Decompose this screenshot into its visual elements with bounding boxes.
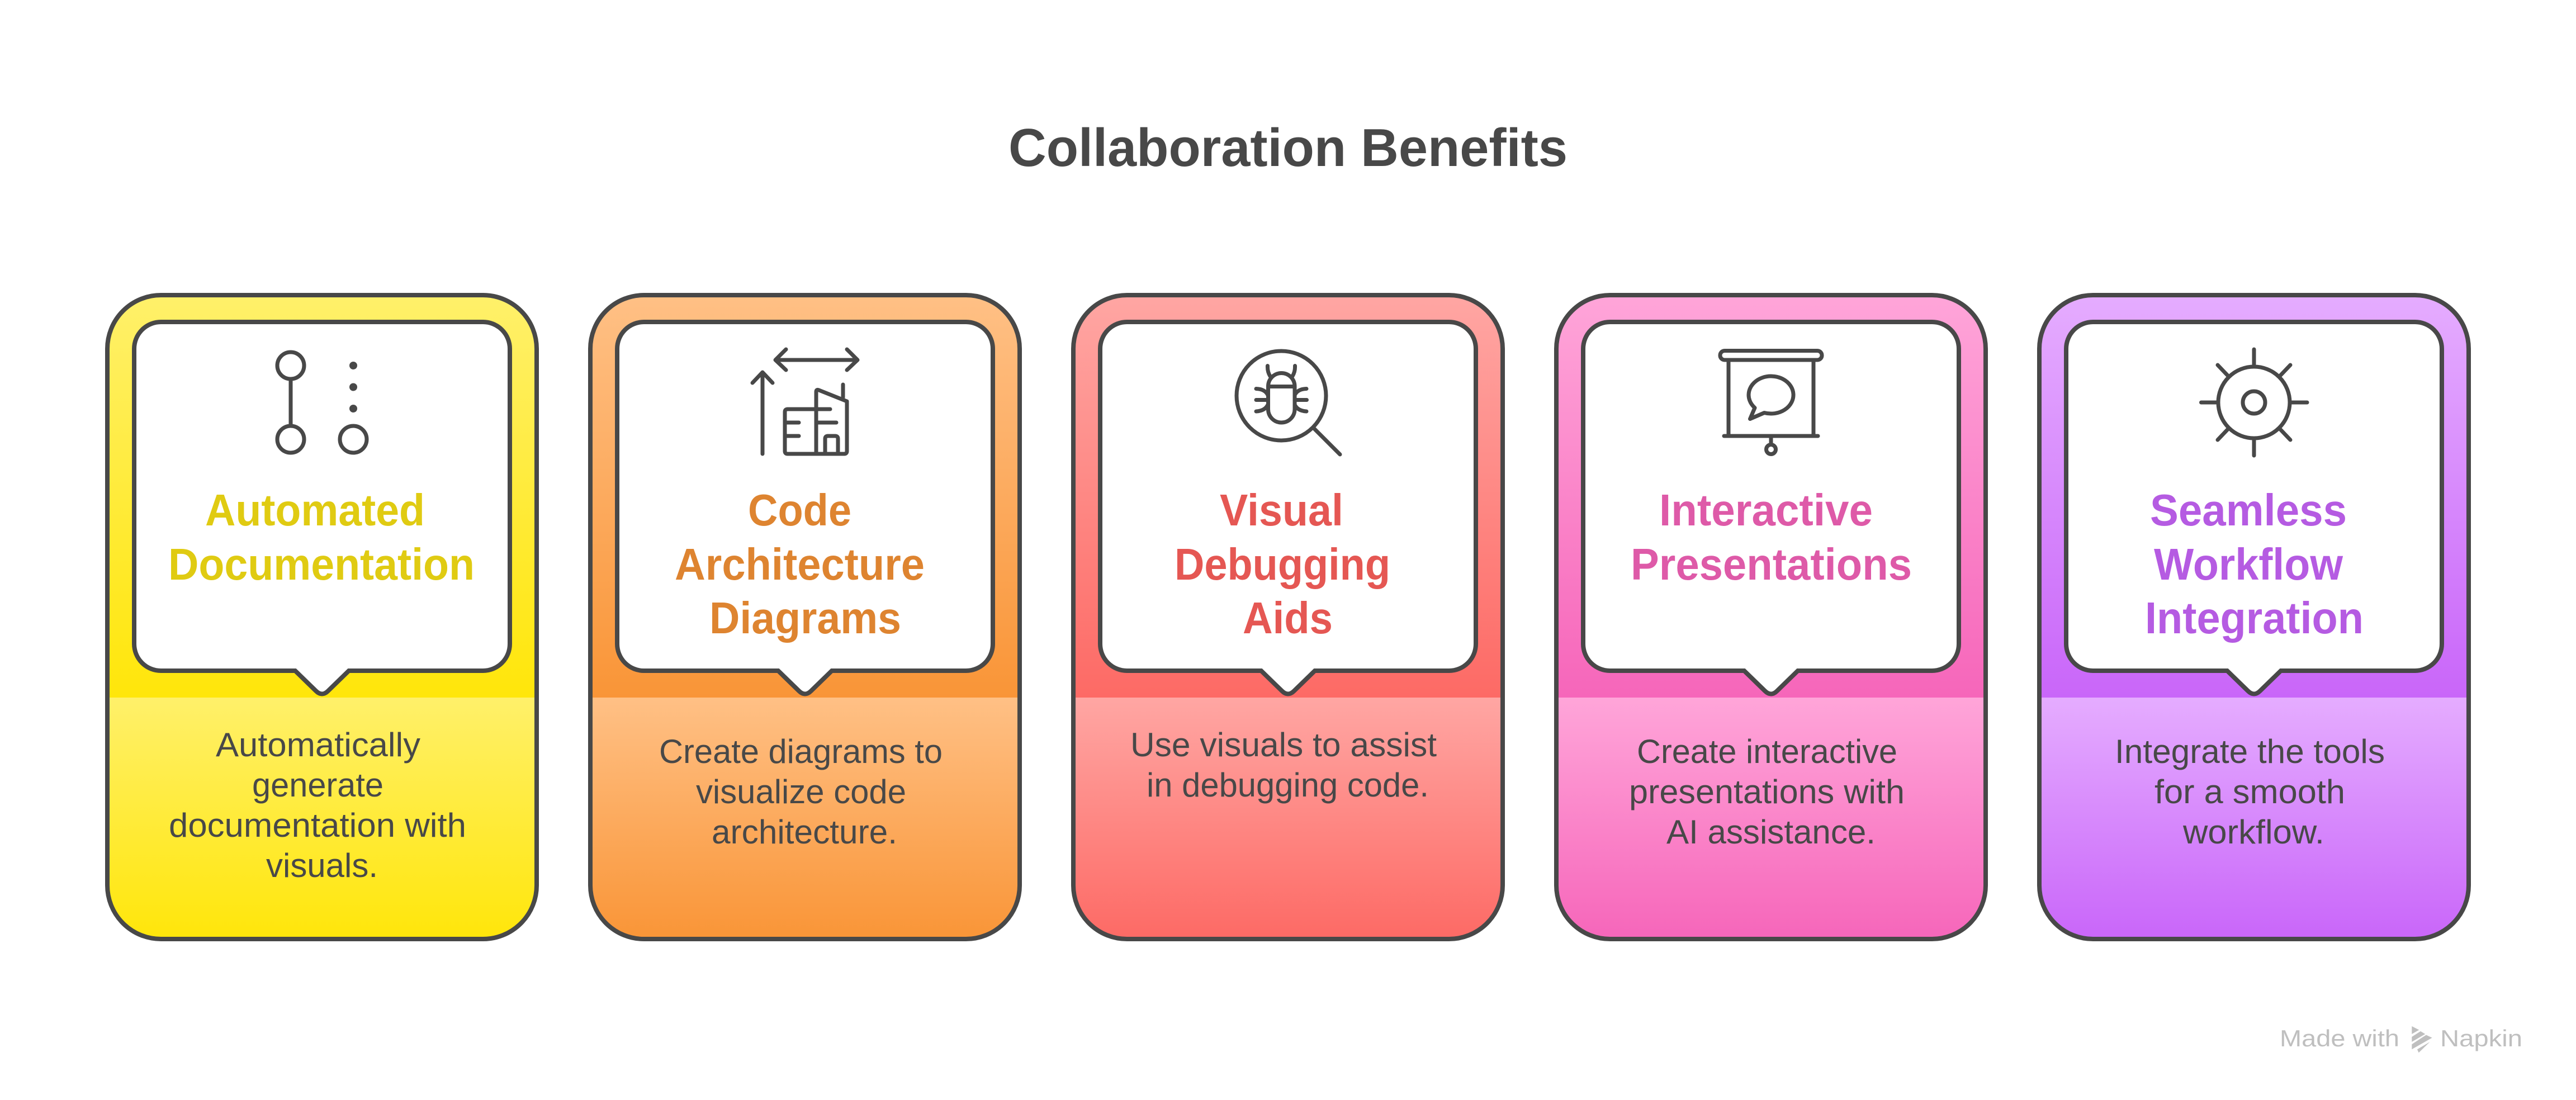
heading: Seamless Workflow Integration: Workflow bbox=[2154, 539, 2343, 589]
callout box bbox=[2066, 322, 2442, 694]
card outline bbox=[1556, 295, 1986, 939]
heading: Visual Debugging Aids: Debugging bbox=[1175, 539, 1390, 589]
callout box bbox=[1583, 322, 1959, 694]
heading: Code Architecture Diagrams: Architecture bbox=[675, 539, 925, 589]
panel: Code Architecture Diagrams bbox=[590, 295, 1020, 939]
icon: connected nodes bbox=[277, 352, 367, 453]
panel: Interactive Presentations bbox=[1556, 295, 1986, 939]
card lower background bbox=[2039, 698, 2469, 939]
callout box bbox=[617, 322, 993, 694]
description bbox=[1629, 733, 1905, 851]
heading: Automated Documentation: Automated bbox=[205, 485, 425, 535]
heading: Automated Documentation: Documentation bbox=[168, 539, 475, 589]
card upper background bbox=[1073, 295, 1503, 698]
icon: building with dimension arrows bbox=[752, 349, 858, 454]
watermark: Made with Napkin bbox=[2280, 1025, 2522, 1052]
description: Create diagrams to bbox=[659, 733, 943, 770]
description: generate bbox=[252, 766, 383, 804]
card upper background bbox=[590, 295, 1020, 698]
icon: bug under magnifier bbox=[1237, 351, 1340, 454]
card upper background bbox=[1556, 295, 1986, 698]
title: Collaboration Benefits bbox=[1008, 118, 1568, 178]
description: visuals. bbox=[266, 847, 378, 884]
description: documentation with bbox=[169, 807, 466, 844]
description: visualize code bbox=[696, 773, 906, 810]
card outline bbox=[590, 295, 1020, 939]
description: for a smooth bbox=[2154, 773, 2345, 810]
card upper background bbox=[2039, 295, 2469, 698]
callout box bbox=[134, 322, 510, 694]
description bbox=[1130, 726, 1437, 804]
watermark: Made with Napkin: Napkin bbox=[2440, 1025, 2522, 1051]
card outline bbox=[2039, 295, 2469, 939]
card lower background bbox=[1556, 698, 1986, 939]
card lower background bbox=[107, 698, 537, 939]
heading: Code Architecture Diagrams: Code bbox=[748, 485, 851, 535]
description: Create interactive bbox=[1637, 733, 1897, 770]
callout box bbox=[1100, 322, 1476, 694]
description: in debugging code. bbox=[1147, 766, 1429, 804]
heading: Interactive Presentations bbox=[1631, 485, 1912, 589]
card outline bbox=[107, 295, 537, 939]
heading: Interactive Presentations: Presentations bbox=[1631, 539, 1912, 589]
heading: Seamless Workflow Integration: Seamless bbox=[2150, 485, 2347, 535]
card lower background bbox=[1073, 698, 1503, 939]
panel: Seamless Workflow Integration bbox=[2039, 295, 2469, 939]
description: Use visuals to assist bbox=[1130, 726, 1437, 764]
icon: gear with rays bbox=[2201, 349, 2307, 456]
heading: Code Architecture Diagrams: Diagrams bbox=[709, 593, 901, 643]
card upper background bbox=[107, 295, 537, 698]
heading: Visual Debugging Aids: Visual bbox=[1220, 485, 1343, 535]
panel: Automated Documentation bbox=[107, 295, 537, 939]
description bbox=[659, 733, 943, 851]
heading: Automated Documentation bbox=[168, 485, 475, 589]
icon: Napkin logo bbox=[2412, 1026, 2432, 1052]
description bbox=[2115, 733, 2385, 851]
heading: Seamless Workflow Integration: Integration bbox=[2145, 593, 2364, 643]
description: AI assistance. bbox=[1666, 813, 1876, 851]
description: architecture. bbox=[712, 813, 897, 851]
description bbox=[169, 726, 466, 884]
heading: Visual Debugging Aids bbox=[1175, 485, 1390, 643]
heading: Code Architecture Diagrams bbox=[675, 485, 925, 643]
icon: projector screen with speech bubble bbox=[1720, 351, 1822, 454]
watermark: Made with Napkin: Made with bbox=[2280, 1025, 2399, 1051]
description: presentations with bbox=[1629, 773, 1905, 810]
panel: Visual Debugging Aids bbox=[1073, 295, 1503, 939]
description: workflow. bbox=[2182, 813, 2324, 851]
heading: Visual Debugging Aids: Aids bbox=[1243, 593, 1333, 643]
card lower background bbox=[590, 698, 1020, 939]
description: Integrate the tools bbox=[2115, 733, 2385, 770]
heading: Seamless Workflow Integration bbox=[2145, 485, 2364, 643]
card outline bbox=[1073, 295, 1503, 939]
heading: Interactive Presentations: Interactive bbox=[1659, 485, 1873, 535]
description: Automatically bbox=[216, 726, 420, 764]
